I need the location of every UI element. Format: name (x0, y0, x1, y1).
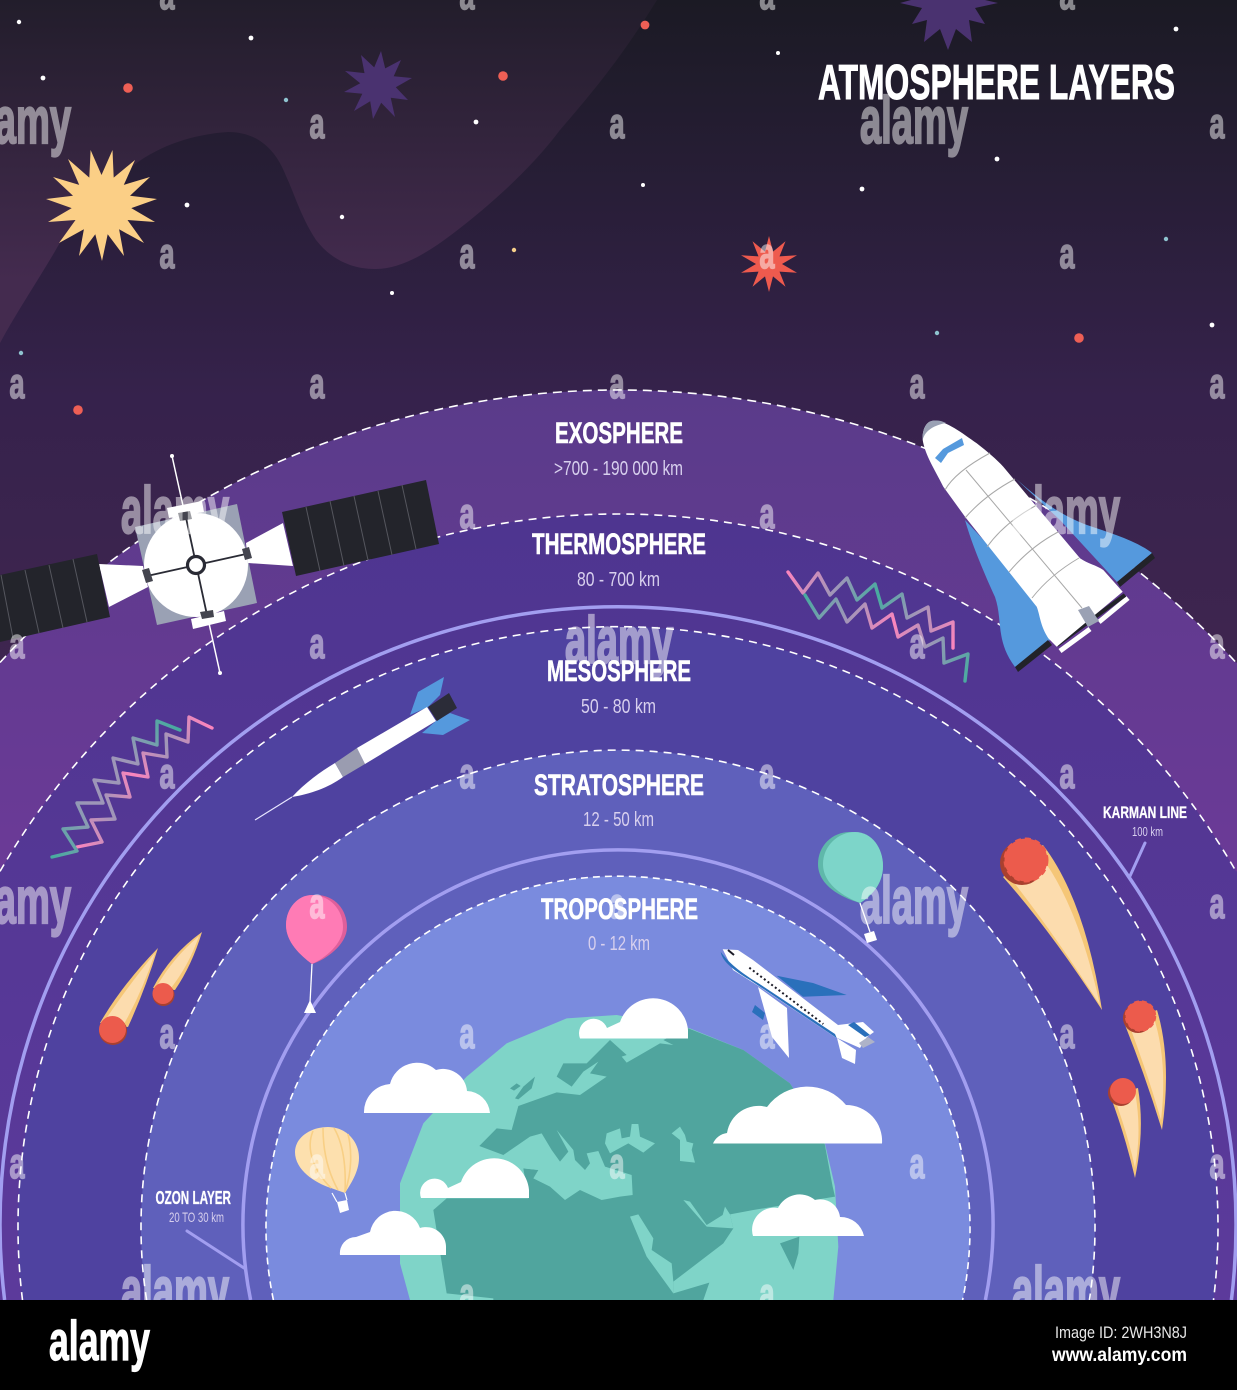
label: exosphere: EXOSPHERE (555, 417, 683, 450)
callout: ozon layer (156, 1188, 244, 1268)
watermark pattern: alamy (121, 1253, 229, 1327)
engine block (1078, 606, 1099, 627)
label: troposphere: 0 - 12 km (588, 933, 650, 955)
watermark pattern: alamy (1012, 473, 1120, 547)
fuselage (923, 421, 1123, 647)
nose (292, 763, 343, 797)
windows (749, 968, 823, 1024)
watermark pattern: a (310, 360, 325, 408)
watermark pattern: a (1060, 750, 1075, 798)
cloud: upper left (364, 1063, 490, 1113)
islands (510, 1077, 799, 1270)
rocket end (428, 693, 457, 721)
strut clamps (142, 511, 252, 619)
label: stratosphere (534, 769, 704, 831)
cockpit (728, 950, 734, 955)
footer logo: alamy (49, 1309, 150, 1372)
watermark pattern: a (460, 230, 475, 278)
icon: sun star (46, 150, 157, 261)
airplane (721, 949, 875, 1064)
rocket (255, 677, 470, 820)
watermark pattern: a (910, 1140, 925, 1188)
cloud: lower right (752, 1194, 864, 1236)
cloud: lower left (340, 1211, 446, 1255)
panel connectors (99, 523, 293, 607)
callout: karman line (1103, 803, 1187, 876)
cloud: middle left (420, 1158, 529, 1198)
watermark pattern: alamy (121, 473, 229, 547)
watermark pattern: a (460, 1270, 475, 1318)
karman line arc (0, 607, 1236, 1300)
round body (144, 513, 248, 617)
stratosphere boundary (141, 750, 1095, 1300)
cloud: big right (713, 1087, 882, 1144)
icon: red star (741, 236, 797, 292)
callout: karman line: 100 km (1132, 824, 1163, 839)
image id: Image ID: 2WH3N8J (1055, 1323, 1187, 1342)
panel: troposphere layer (266, 876, 970, 1300)
label: thermosphere: 80 - 700 km (577, 569, 660, 591)
icon: purple star (344, 51, 412, 119)
panel lines (945, 453, 1082, 608)
panel: stratosphere layer (141, 750, 1095, 1300)
space shuttle (923, 420, 1155, 672)
label: mesosphere: MESOSPHERE (547, 655, 691, 688)
center ring (188, 556, 204, 574)
ozone layer arc (243, 850, 993, 1300)
watermark pattern: a (610, 880, 625, 928)
ocean (400, 1015, 838, 1300)
cross struts (147, 513, 246, 615)
cockpit window (935, 438, 964, 463)
watermark pattern: a (1210, 100, 1225, 148)
watermark pattern: a (610, 100, 625, 148)
body (357, 707, 436, 764)
far wing (777, 976, 847, 997)
zigzag waves left (52, 717, 212, 857)
watermark pattern: a (160, 1010, 175, 1058)
watermark pattern: alamy (860, 863, 968, 937)
stabilizer (838, 1022, 874, 1048)
panel: thermosphere layer (0, 514, 1237, 1300)
watermark pattern: alamy (565, 603, 673, 677)
engine bar (1057, 595, 1125, 645)
tail fin (837, 1038, 856, 1064)
watermark pattern: a (760, 750, 775, 798)
label: stratosphere: STRATOSPHERE (534, 769, 704, 802)
stabilizer stripe (848, 1022, 870, 1037)
icon: top purple star (900, 0, 998, 50)
label: troposphere: TROPOSPHERE (541, 893, 698, 926)
watermark pattern: a (610, 1140, 625, 1188)
label: mesosphere (547, 655, 691, 718)
wing edges (1015, 553, 1155, 672)
fuselage (723, 949, 863, 1048)
watermark pattern: a (760, 230, 775, 278)
label: exosphere: >700 - 190 000 km (554, 458, 683, 480)
satellite (0, 454, 439, 675)
label: mesosphere: 50 - 80 km (581, 696, 656, 718)
engine (752, 1005, 765, 1020)
watermark pattern: a (1060, 1010, 1075, 1058)
sky nebula shape (0, 0, 657, 343)
watermark pattern: a (310, 100, 325, 148)
watermark pattern: a (160, 750, 175, 798)
engine stripes (1060, 598, 1128, 651)
seas (503, 1124, 733, 1293)
footer bar (0, 1300, 1237, 1390)
top and bottom tabs (167, 501, 226, 629)
mesosphere boundary (18, 627, 1218, 1300)
watermark pattern: a (10, 620, 25, 668)
pink balloon (286, 895, 347, 1013)
watermark pattern: a (310, 620, 325, 668)
solar panel right (282, 480, 439, 576)
watermark pattern: a (1210, 1140, 1225, 1188)
watermark pattern: a (610, 360, 625, 408)
solar panel left (0, 554, 110, 642)
watermark pattern: a (460, 750, 475, 798)
callout: ozon layer: 20 TO 30 km (169, 1209, 224, 1225)
callout: ozon layer: OZON LAYER (156, 1188, 231, 1208)
watermark pattern: a (910, 620, 925, 668)
clouds (340, 998, 882, 1255)
watermark pattern: a (1210, 880, 1225, 928)
watermark pattern: a (1210, 620, 1225, 668)
label: thermosphere: THERMOSPHERE (532, 528, 706, 561)
watermark pattern: a (1060, 230, 1075, 278)
fins (410, 677, 470, 735)
watermark pattern: alamy (1012, 1253, 1120, 1327)
watermark pattern: a (310, 1140, 325, 1188)
exosphere boundary (0, 390, 1236, 662)
teal balloon (818, 832, 883, 943)
callout: karman line: KARMAN LINE (1103, 803, 1187, 822)
watermark pattern: a (460, 490, 475, 538)
meteor right small (1108, 1078, 1141, 1178)
label: troposphere (541, 893, 698, 955)
meteor right large (1000, 838, 1102, 1010)
watermark pattern: a (760, 490, 775, 538)
tail grey (859, 1037, 875, 1048)
grey band (335, 748, 365, 777)
thermosphere boundary (0, 514, 1236, 871)
label: thermosphere (532, 528, 706, 591)
watermark pattern: a (310, 880, 325, 928)
label: exosphere (554, 417, 683, 480)
needle (255, 797, 292, 820)
zigzag waves right (788, 572, 968, 681)
near wing (758, 987, 789, 1058)
watermark pattern: a (10, 360, 25, 408)
watermark pattern: a (10, 1140, 25, 1188)
body plate (135, 504, 257, 625)
meteor right medium (1123, 1001, 1166, 1130)
stars and dots (17, 20, 1214, 415)
label: stratosphere: 12 - 50 km (583, 809, 654, 831)
panel: mesosphere layer (18, 627, 1218, 1300)
watermark pattern: a (760, 1010, 775, 1058)
wings (965, 478, 1152, 667)
website: www.alamy.com (1051, 1345, 1187, 1366)
belly stripe (721, 952, 837, 1038)
watermark pattern: a (460, 1010, 475, 1058)
land masses (433, 1028, 835, 1300)
antenna (172, 456, 220, 673)
watermark pattern: a (910, 360, 925, 408)
cloud: top of globe (579, 998, 688, 1038)
meteor left large (99, 948, 158, 1045)
earth globe (400, 1015, 838, 1300)
watermark pattern: a (760, 1270, 775, 1318)
troposphere boundary (266, 876, 970, 1300)
watermark pattern: alamy (860, 83, 968, 157)
meteor left small (152, 932, 202, 1006)
watermark pattern: a (160, 230, 175, 278)
watermark pattern: a (1210, 360, 1225, 408)
nose cap (923, 420, 946, 440)
panel: exosphere layer (0, 390, 1237, 1300)
antenna tips (170, 454, 222, 675)
hot air balloon (295, 1127, 359, 1213)
